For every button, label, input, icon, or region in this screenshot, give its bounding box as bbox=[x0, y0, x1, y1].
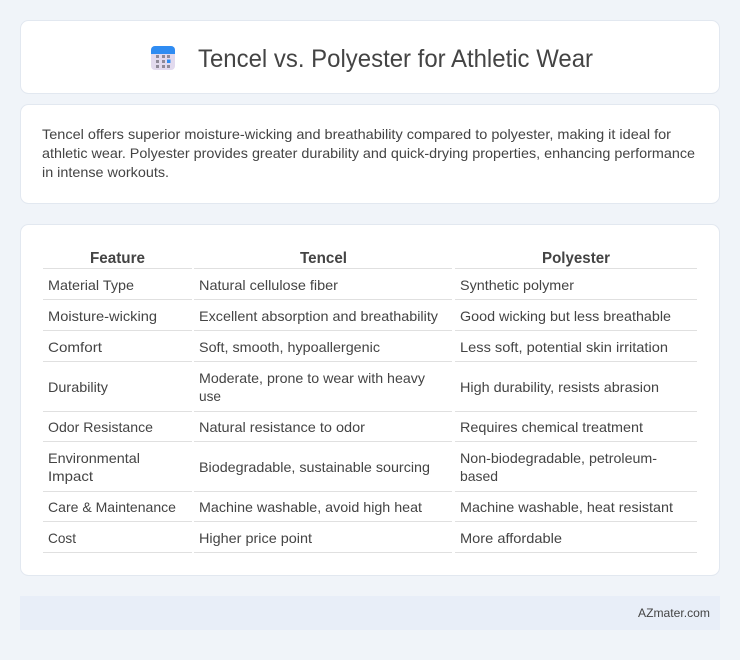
icon: calendar bbox=[151, 46, 175, 70]
row: odor resistance: Requires chemical treatment bbox=[460, 419, 643, 435]
row: environmental impact: based bbox=[460, 468, 498, 484]
row: environmental impact: Non-biodegradable, petroleum- bbox=[460, 450, 657, 466]
row: moisture-wicking bbox=[48, 308, 671, 324]
summary text: Tencel offers superior moisture-wicking and breathability compared to polyester, making it ideal for bbox=[42, 126, 671, 142]
row: durability: use bbox=[199, 388, 221, 404]
row: comfort: Less soft, potential skin irritation bbox=[460, 339, 668, 355]
row: environmental impact: Impact bbox=[48, 468, 93, 484]
row: care and maintenance: Machine washable, avoid high heat bbox=[199, 499, 422, 515]
row: environmental impact bbox=[48, 450, 657, 484]
row: moisture-wicking: Excellent absorption and breathability bbox=[199, 308, 438, 324]
row: durability: Durability bbox=[48, 379, 108, 395]
row: durability bbox=[48, 370, 659, 404]
panel: title header bbox=[20, 20, 720, 94]
row: material type: Material Type bbox=[48, 277, 134, 293]
summary text: athletic wear. Polyester provides greater durability and quick-drying properties, enhancing performance bbox=[42, 145, 695, 161]
table header row: Tencel bbox=[300, 250, 347, 267]
summary text: in intense workouts. bbox=[42, 164, 169, 180]
row: durability: Moderate, prone to wear with heavy bbox=[199, 370, 425, 386]
row: material type bbox=[48, 277, 574, 293]
footer credit: AZmater.com bbox=[638, 606, 710, 620]
row: moisture-wicking: Good wicking but less breathable bbox=[460, 308, 671, 324]
row: environmental impact: Biodegradable, sustainable sourcing bbox=[199, 459, 430, 475]
footer bbox=[20, 596, 720, 630]
table header row: Polyester bbox=[542, 250, 610, 267]
panel: comparison table bbox=[20, 224, 720, 576]
row: environmental impact: Environmental bbox=[48, 450, 140, 466]
row: comfort: Soft, smooth, hypoallergenic bbox=[199, 339, 380, 355]
row: material type: Synthetic polymer bbox=[460, 277, 574, 293]
row: cost: Cost bbox=[48, 530, 76, 546]
row: care and maintenance bbox=[48, 499, 673, 515]
title: Tencel vs. Polyester for Athletic Wear bbox=[198, 45, 593, 73]
row: comfort: Comfort bbox=[48, 339, 102, 355]
row: odor resistance bbox=[48, 419, 643, 435]
row: material type: Natural cellulose fiber bbox=[199, 277, 338, 293]
row: moisture-wicking: Moisture-wicking bbox=[48, 308, 157, 324]
row: cost bbox=[48, 530, 562, 546]
row: care and maintenance: Care & Maintenance bbox=[48, 499, 176, 515]
panel: summary bbox=[20, 104, 720, 204]
summary text bbox=[42, 126, 695, 180]
row: comfort bbox=[48, 339, 668, 355]
row: cost: More affordable bbox=[460, 530, 562, 546]
table header row bbox=[90, 250, 610, 267]
row: care and maintenance: Machine washable, heat resistant bbox=[460, 499, 673, 515]
row: odor resistance: Natural resistance to odor bbox=[199, 419, 365, 435]
row: cost: Higher price point bbox=[199, 530, 312, 546]
table header row: Feature bbox=[90, 250, 145, 267]
row: durability: High durability, resists abrasion bbox=[460, 379, 659, 395]
row: odor resistance: Odor Resistance bbox=[48, 419, 153, 435]
